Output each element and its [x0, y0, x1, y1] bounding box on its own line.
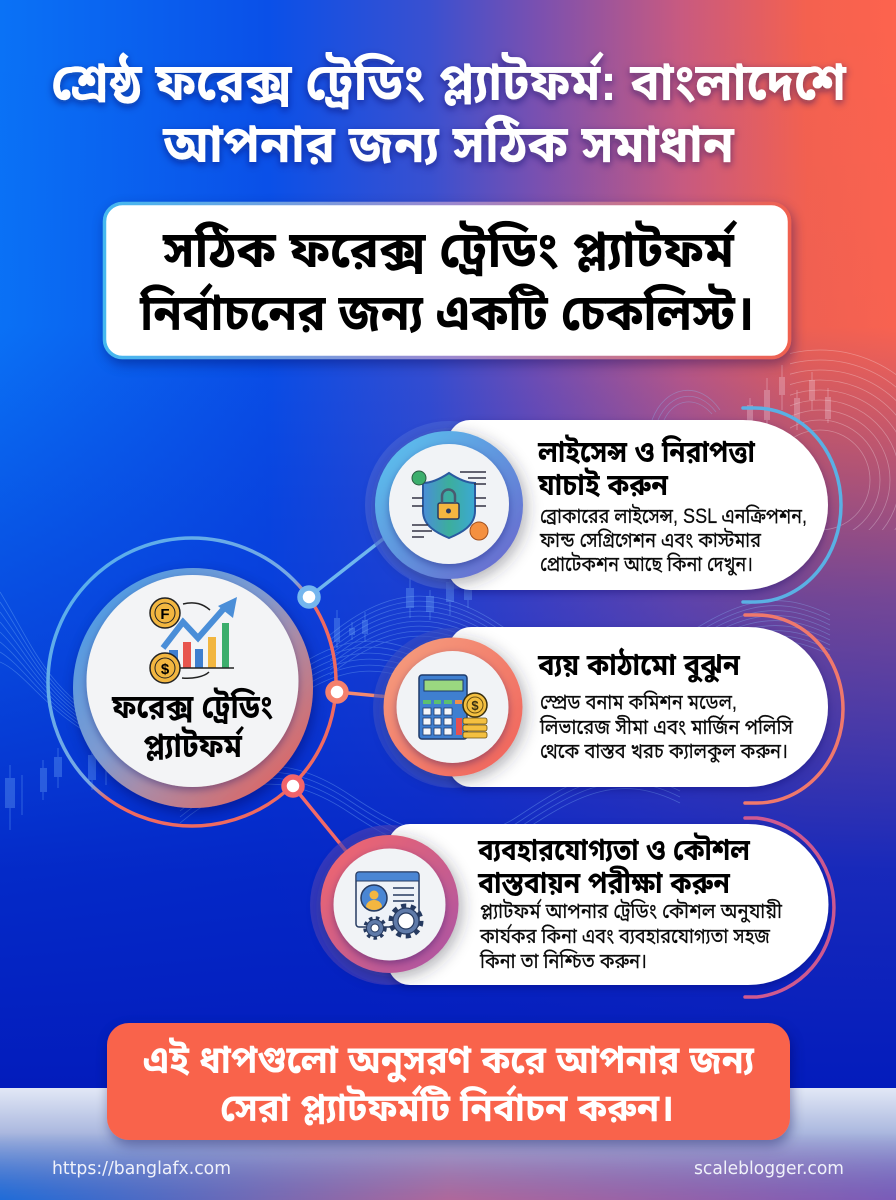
icon: forex chart with coins: F: [160, 606, 170, 623]
panel: licence and security: [365, 420, 828, 590]
icon: forex chart with coins: [150, 597, 237, 683]
wave line pattern: [0, 350, 896, 855]
title: আপনার জন্য সঠিক সমাধান: [162, 114, 735, 174]
connector nodes: [284, 588, 346, 795]
panel: usability and strategy: [310, 824, 828, 985]
central hub: [73, 568, 313, 808]
footer left url: https://banglafx.com: [52, 1158, 231, 1179]
subtitle box: সঠিক ফরেক্স ট্রেডিং প্ল্যাটফর্ম: [162, 220, 738, 278]
icon: forex chart with coins: $: [161, 661, 170, 678]
card outer arcs: [743, 408, 843, 997]
icon: security shield: [412, 471, 488, 540]
panel text: লিভারেজ সীমা এবং মার্জিন পলিসি: [539, 714, 794, 739]
panel text: ব্যয় কাঠামো বুঝুন: [537, 647, 740, 683]
title: শ্রেষ্ঠ ফরেক্স ট্রেডিং প্ল্যাটফর্ম: বাংলাদেশে: [51, 52, 847, 112]
panel text: প্রোটেকশন আছে কিনা দেখুন।: [540, 552, 753, 576]
panel text: [537, 434, 807, 576]
panel text: বাস্তবায়ন পরীক্ষা করুন: [477, 865, 730, 900]
panel text: স্প্রেড বনাম কমিশন মডেল,: [540, 690, 737, 714]
panel: cost structure: [373, 627, 828, 788]
subtitle box: [104, 204, 790, 358]
title: [51, 52, 847, 174]
candlestick decoration: [5, 365, 831, 830]
subtitle box: নির্বাচনের জন্য একটি চেকলিস্ট।: [139, 283, 754, 341]
panel text: যাচাই করুন: [537, 467, 668, 502]
icon: settings window: [356, 872, 421, 938]
call to action: সেরা প্ল্যাটফর্মটি নির্বাচন করুন।: [220, 1084, 674, 1130]
hub label: প্ল্যাটফর্ম: [143, 726, 244, 764]
call to action: এই ধাপগুলো অনুসরণ করে আপনার জন্য: [143, 1037, 755, 1083]
panel text: ব্যবহারযোগ্যতা ও কৌশল: [477, 832, 751, 867]
connector ring: [48, 532, 392, 851]
icon: calculator with coins: [419, 675, 487, 739]
icon: calculator with coins: $: [471, 698, 479, 713]
panel text: কার্যকর কিনা এবং ব্যবহারযোগ্যতা সহজ: [479, 923, 771, 948]
panel text: কিনা তা নিশ্চিত করুন।: [479, 949, 647, 973]
panel text: লাইসেন্স ও নিরাপত্তা: [537, 434, 755, 469]
footer right url: scaleblogger.com: [694, 1158, 844, 1179]
panel text: ফান্ড সেগ্রিগেশন এবং কাস্টমার: [539, 528, 761, 552]
panel text: [477, 832, 782, 973]
panel text: ব্রোকারের লাইসেন্স, SSL এনক্রিপশন,: [540, 504, 807, 528]
panel text: থেকে বাস্তব খরচ ক্যালকুল করুন।: [540, 740, 788, 763]
hub label: [111, 688, 273, 764]
call to action: [107, 1023, 790, 1140]
hub label: ফরেক্স ট্রেডিং: [111, 688, 273, 725]
panel text: [537, 647, 794, 763]
panel text: প্ল্যাটফর্ম আপনার ট্রেডিং কৌশল অনুযায়ী: [480, 898, 782, 923]
